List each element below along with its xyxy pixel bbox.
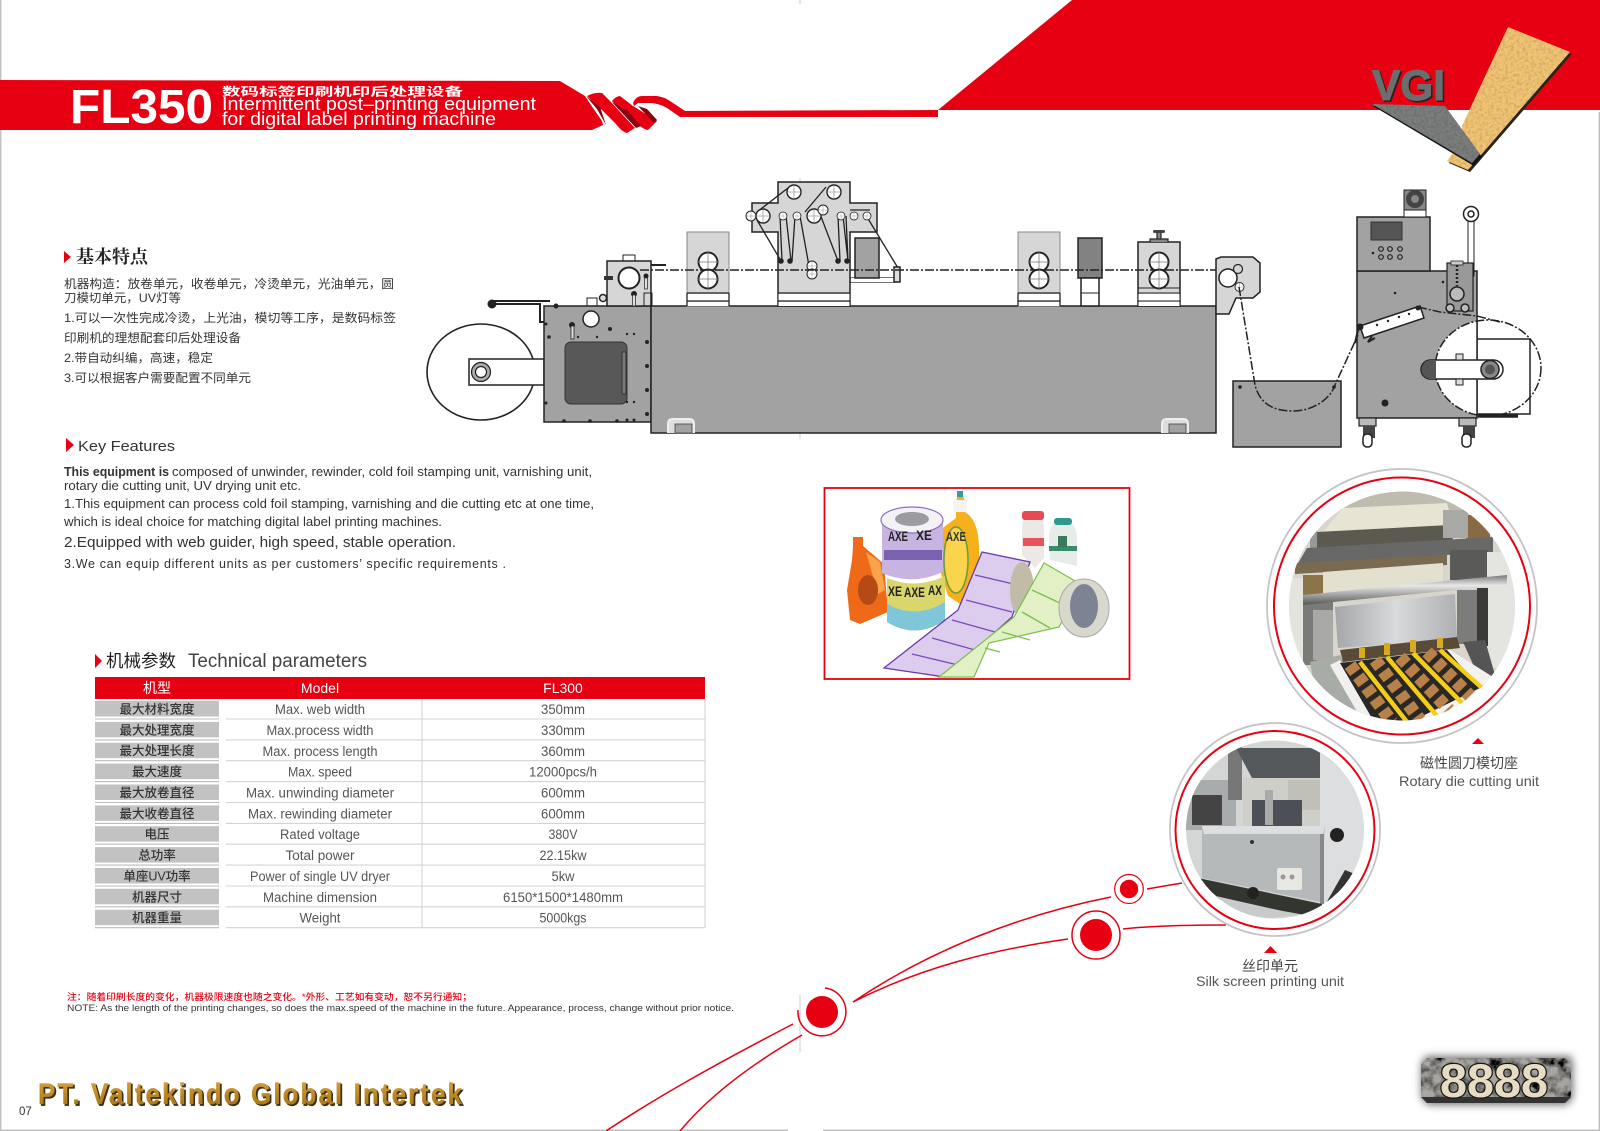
plate digits: 8888 <box>1440 1054 1548 1107</box>
unwinder tension arm <box>488 300 550 322</box>
row: weight: 机器重量 <box>132 910 182 925</box>
title banner <box>0 80 938 134</box>
row: unwinding diameter <box>119 785 585 800</box>
model number: FL350 <box>70 81 213 134</box>
row: web width: Max. web width <box>275 702 365 717</box>
arrow <box>95 654 102 668</box>
row: process width <box>119 722 585 738</box>
technical parameters heading <box>95 651 367 672</box>
AXE label roll stack: XE <box>888 583 902 599</box>
row: weight <box>132 910 587 926</box>
banner title chinese: 数码标签印刷机印后处理设备 <box>222 84 464 98</box>
banner title english: for digital label printing machine <box>222 108 496 129</box>
row: weight: 5000kgs <box>540 911 587 926</box>
AXE label roll stack <box>881 507 945 631</box>
outer rings <box>1170 723 1380 936</box>
unwinder roll <box>427 324 544 420</box>
product photo panel <box>824 488 1130 679</box>
photo frame <box>824 488 1130 679</box>
row: voltage: 电压 <box>144 828 170 842</box>
row: UV dryer power <box>123 868 575 884</box>
outer rings <box>1267 469 1537 743</box>
page number: 07 <box>19 1106 32 1118</box>
logo gold wedge <box>1447 27 1572 172</box>
feature text: 1.This equipment can process cold foil stamping, varnishing and die cutting etc at one time, <box>64 497 594 511</box>
row: speed <box>132 764 597 780</box>
rotary label: Rotary die cutting unit <box>1399 773 1539 789</box>
rotary label <box>1399 755 1539 789</box>
row: UV dryer power: 5kw <box>552 869 575 884</box>
row: speed: 最大速度 <box>132 764 182 779</box>
feature text: 1.可以一次性完成冷烫，上光油，模切等工序，是数码标签 <box>64 310 396 325</box>
row: web width: 最大材料宽度 <box>119 702 195 716</box>
rewinder tension arm <box>1446 206 1478 312</box>
footnote: NOTE: As the length of the printing changes, so does the max.speed of the machine in the future. Appearance, process, change without prior notice. <box>67 1003 734 1014</box>
AXE label roll stack: XE <box>916 527 932 543</box>
plate <box>1421 1056 1573 1105</box>
feature text: rotary die cutting unit, UV drying unit etc. <box>64 479 301 493</box>
node medium <box>1072 911 1120 959</box>
footnote <box>67 991 734 1014</box>
feature text: 2.带自动纠编，高速，稳定 <box>64 350 213 365</box>
feature text: 机器构造：放卷单元，收卷单元，冷烫单元，光油单元，圆 <box>64 276 394 291</box>
row: total power: Total power <box>286 848 355 863</box>
heading chinese: 机械参数 <box>106 651 176 671</box>
row label cells <box>95 701 219 925</box>
feature text <box>63 465 594 571</box>
logo lettering: VGI <box>1374 64 1446 112</box>
row: total power: 总功率 <box>138 848 176 863</box>
stone number plate <box>1421 1054 1573 1107</box>
rotary label: 磁性圆刀模切座 <box>1420 755 1518 771</box>
unwinder panel <box>544 304 651 423</box>
company name: PT. Valtekindo Global Intertek <box>38 1077 462 1110</box>
dancer bar <box>1355 306 1424 343</box>
AXE label roll stack: AXE <box>888 528 908 544</box>
AXE label roll stack: AX <box>928 582 942 598</box>
photo: silk screen unit <box>1186 740 1364 918</box>
web path upper <box>640 269 1216 271</box>
rotary die cutting photo circle <box>1267 469 1537 743</box>
row: process length: 360mm <box>541 744 585 759</box>
main cabinet <box>651 306 1216 433</box>
silk screen photo circle <box>1170 723 1380 936</box>
row: weight: Weight <box>300 911 341 926</box>
row: process length: 最大处理长度 <box>119 743 195 758</box>
row: rewinding diameter <box>119 806 585 821</box>
rewinder roll <box>1421 320 1541 418</box>
connector curves <box>606 883 1226 1131</box>
table grid <box>95 699 705 928</box>
yellow bottle <box>940 491 979 604</box>
section: key features english <box>63 438 594 571</box>
row: total power: 22.15kw <box>540 848 587 863</box>
feature text: 2.Equipped with web guider, high speed, stable operation. <box>64 535 456 551</box>
rotary label marker <box>1472 738 1484 744</box>
row: dimension: Machine dimension <box>263 890 377 905</box>
web path to rewinder <box>1418 307 1500 322</box>
footnote: 注：随着印刷长度的变化，机器极限速度也随之变化。*外形、工艺如有变动，恕不另行通知； <box>67 991 472 1002</box>
row: dimension <box>132 890 623 905</box>
yellow bottle: AXE <box>946 529 966 544</box>
row: speed: 12000pcs/h <box>529 764 597 780</box>
table header: FL300 <box>543 680 583 696</box>
print unit 1 <box>687 232 729 306</box>
web path lower <box>1239 287 1358 411</box>
table header: 机型 <box>143 680 171 696</box>
row: web width <box>119 702 585 717</box>
logo lettering: VGI <box>1372 62 1445 110</box>
print unit 2 <box>1018 232 1060 306</box>
row: rewinding diameter: 600mm <box>541 806 585 821</box>
purple label strip <box>884 552 1034 677</box>
row: process width: 330mm <box>541 723 585 738</box>
white bottles <box>1022 511 1077 568</box>
heading: 基本特点 <box>76 247 150 267</box>
row: unwinding diameter: 最大放卷直径 <box>119 785 195 800</box>
top right red band <box>938 0 1600 110</box>
silk label: Silk screen printing unit <box>1196 973 1344 989</box>
feature text: composed of unwinder, rewinder, cold foil stamping unit, varnishing unit, <box>172 465 592 479</box>
feature text: which is ideal choice for matching digital label printing machines. <box>63 515 442 529</box>
row: rewinding diameter: Max. rewinding diameter <box>248 806 392 821</box>
arrow <box>64 251 71 263</box>
VGI logo <box>1372 27 1572 172</box>
row: process width: Max.process width <box>266 723 374 738</box>
cold foil unit large <box>745 182 900 306</box>
feature text: This equipment is <box>64 465 169 479</box>
banner title english <box>222 93 536 129</box>
row: speed: Max. speed <box>288 764 352 780</box>
row: UV dryer power: 单座UV功率 <box>123 868 191 884</box>
heading: Key Features <box>78 438 175 455</box>
silk label: 丝印单元 <box>1242 958 1298 974</box>
feature text: 刀模切单元，UV灯等 <box>64 291 181 305</box>
row: rewinding diameter: 最大收卷直径 <box>119 806 195 821</box>
feature text: 3.We can equip different units as per customers’ specific requirements . <box>64 557 506 571</box>
feature text: 印刷机的理想配套印后处理设备 <box>64 330 241 345</box>
row: voltage: Rated voltage <box>280 827 360 842</box>
table header <box>95 677 705 699</box>
node small <box>1115 874 1143 904</box>
UV lamp unit <box>1078 238 1102 306</box>
banner ribbon <box>0 80 938 133</box>
table header: Model <box>301 680 339 696</box>
machine diagram <box>427 182 1541 447</box>
row: UV dryer power: Power of single UV dryer <box>250 869 390 884</box>
row: process length <box>119 743 585 759</box>
green label roll <box>939 563 1109 677</box>
row: process length: Max. process length <box>262 744 378 759</box>
row: voltage: 380V <box>548 827 578 842</box>
row: web width: 350mm <box>541 702 585 717</box>
AXE label roll stack: AXE <box>904 584 925 600</box>
heading english: Technical parameters <box>188 651 367 672</box>
arrow <box>66 438 74 452</box>
logo gray wedge <box>1372 104 1482 166</box>
silk label marker <box>1264 946 1277 953</box>
company name: PT. Valtekindo Global Intertek <box>40 1079 464 1112</box>
row: unwinding diameter: 600mm <box>541 786 585 800</box>
rewinder motor <box>1404 190 1426 217</box>
technical parameters table <box>95 677 705 928</box>
cold foil unit small <box>587 255 666 306</box>
photo: rotary die unit <box>1285 490 1520 725</box>
rewinder cabinet <box>1357 217 1477 418</box>
row: unwinding diameter: Max. unwinding diameter <box>246 786 394 800</box>
section: basic features chinese <box>64 247 396 385</box>
banner title english: Intermittent post–printing equipment <box>222 93 536 114</box>
casters <box>1359 418 1476 447</box>
feature text <box>64 276 396 385</box>
node large <box>798 988 846 1036</box>
row: process width: 最大处理宽度 <box>119 722 195 737</box>
connector lines and nodes <box>606 874 1226 1131</box>
row: total power <box>138 848 587 863</box>
row: voltage <box>144 827 578 842</box>
feature text: 3.可以根据客户需要配置不同单元 <box>64 370 251 385</box>
guide bracket <box>1216 257 1260 314</box>
orange bottle <box>847 537 888 624</box>
row: dimension: 机器尺寸 <box>132 890 182 904</box>
buffer box <box>1233 381 1341 447</box>
row: dimension: 6150*1500*1480mm <box>503 890 623 905</box>
print unit 3 <box>1138 230 1180 306</box>
silk label <box>1196 958 1344 989</box>
